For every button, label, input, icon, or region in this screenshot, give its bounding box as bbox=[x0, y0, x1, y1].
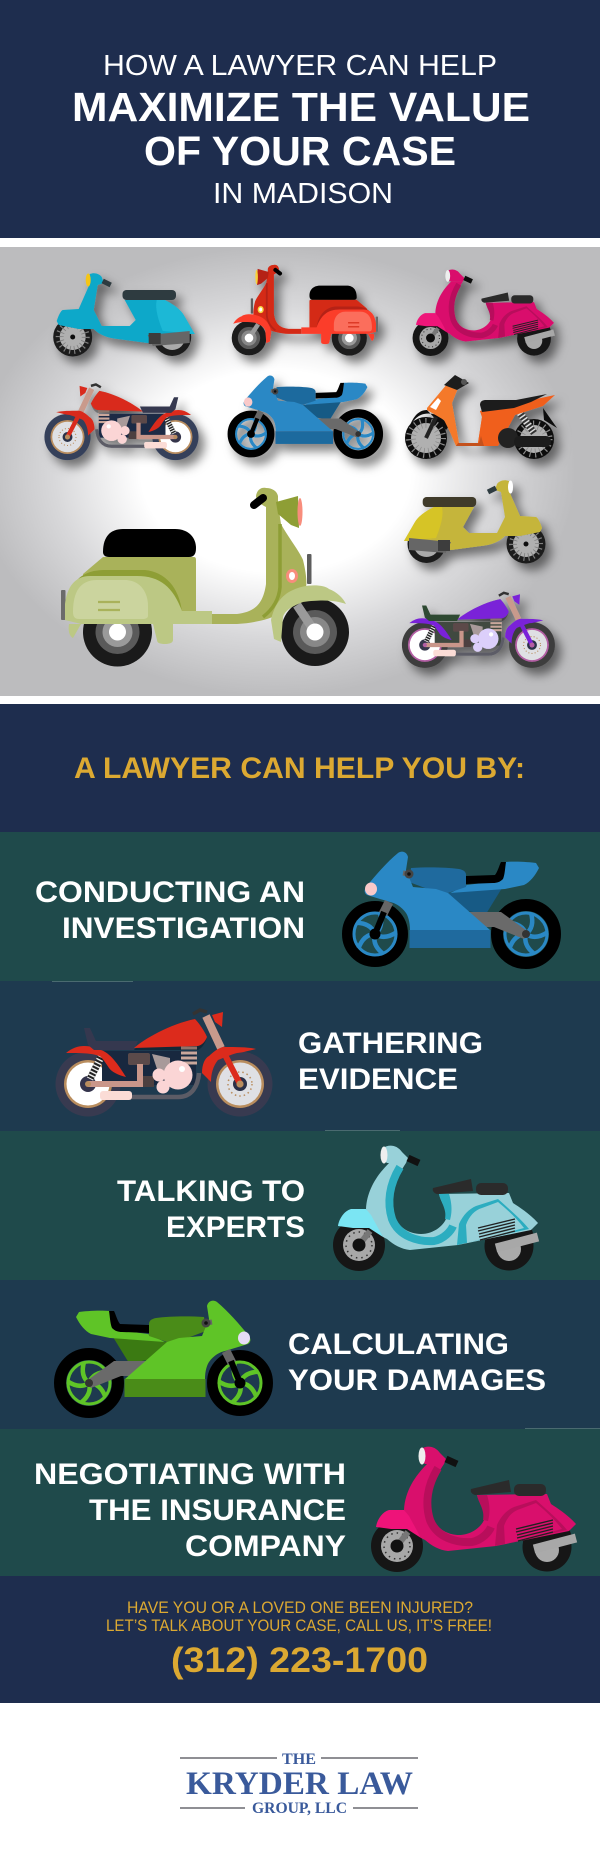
icon: magenta scooter bbox=[371, 1447, 576, 1572]
text: talking to experts: TALKING TO bbox=[117, 1175, 305, 1208]
text: conducting an investigation bbox=[35, 876, 305, 945]
icon: blue sport bike bbox=[348, 852, 555, 963]
scooter: orange bbox=[405, 375, 557, 459]
text: gathering evidence: EVIDENCE bbox=[298, 1063, 458, 1096]
panel: talking to experts bbox=[0, 1130, 600, 1280]
text: negotiating with the insurance company bbox=[34, 1458, 346, 1563]
text: gathering evidence bbox=[298, 1027, 483, 1096]
call to action panel bbox=[0, 1576, 600, 1703]
logo: the kryder law group bbox=[180, 1751, 418, 1817]
title line: in madison: IN MADISON bbox=[213, 178, 393, 210]
text: conducting an investigation: INVESTIGATION bbox=[62, 912, 305, 945]
scooter: magenta bbox=[413, 269, 554, 356]
scooter: large olive green bbox=[61, 488, 349, 666]
scooter: yellow bbox=[404, 480, 546, 564]
panel: calculating your damages bbox=[0, 1280, 600, 1429]
text: negotiating with the insurance company: NEGOTIATING WITH bbox=[34, 1458, 346, 1491]
icon: light blue scooter bbox=[333, 1146, 538, 1271]
section heading panel bbox=[0, 704, 600, 832]
panel: conducting an investigation bbox=[0, 832, 600, 981]
text: calculating your damages: YOUR DAMAGES bbox=[288, 1364, 546, 1397]
text: call to action: LET’S TALK ABOUT YOUR CASE, CALL US, IT’S FREE! bbox=[106, 1616, 492, 1635]
phone number: (312) 223-1700 bbox=[171, 1641, 428, 1680]
motorcycle: blue sport bike bbox=[232, 375, 379, 455]
text: gathering evidence: GATHERING bbox=[298, 1027, 483, 1060]
icon: green sport bike bbox=[60, 1301, 267, 1412]
text: talking to experts: EXPERTS bbox=[166, 1211, 305, 1244]
header panel bbox=[0, 0, 600, 238]
motorcycle: red cruiser bbox=[44, 384, 198, 460]
text: calculating your damages: CALCULATING bbox=[288, 1328, 509, 1361]
panel: negotiating with the insurance company bbox=[0, 1428, 600, 1576]
panel: gathering evidence bbox=[0, 981, 600, 1131]
heading: a lawyer can help you by: A LAWYER CAN HELP YOU BY: bbox=[74, 752, 525, 785]
text: call to action: HAVE YOU OR A LOVED ONE BEEN INJURED? bbox=[127, 1598, 473, 1617]
title line: how a lawyer can help: HOW A LAWYER CAN HELP bbox=[103, 50, 497, 82]
icon: red cruiser motorcycle bbox=[56, 1010, 272, 1116]
text: conducting an investigation: CONDUCTING AN bbox=[35, 876, 305, 909]
logo: the kryder law group: GROUP, LLC bbox=[252, 1800, 347, 1817]
text: negotiating with the insurance company: COMPANY bbox=[185, 1530, 346, 1563]
title line: maximize the value: MAXIMIZE THE VALUE bbox=[72, 84, 530, 130]
motorcycle: purple cruiser bbox=[402, 593, 555, 668]
logo: the kryder law group: THE bbox=[282, 1751, 316, 1768]
text: talking to experts bbox=[117, 1175, 305, 1244]
logo: the kryder law group: KRYDER LAW bbox=[186, 1766, 413, 1802]
scooter: blue bbox=[53, 273, 195, 356]
text: negotiating with the insurance company: THE INSURANCE bbox=[89, 1494, 346, 1527]
scooter: red bbox=[232, 265, 378, 356]
text: call to action bbox=[106, 1598, 492, 1635]
panel: collection of scooters and motorcycles bbox=[0, 247, 600, 696]
text: calculating your damages bbox=[288, 1328, 546, 1397]
title line: of your case: OF YOUR CASE bbox=[144, 128, 456, 174]
